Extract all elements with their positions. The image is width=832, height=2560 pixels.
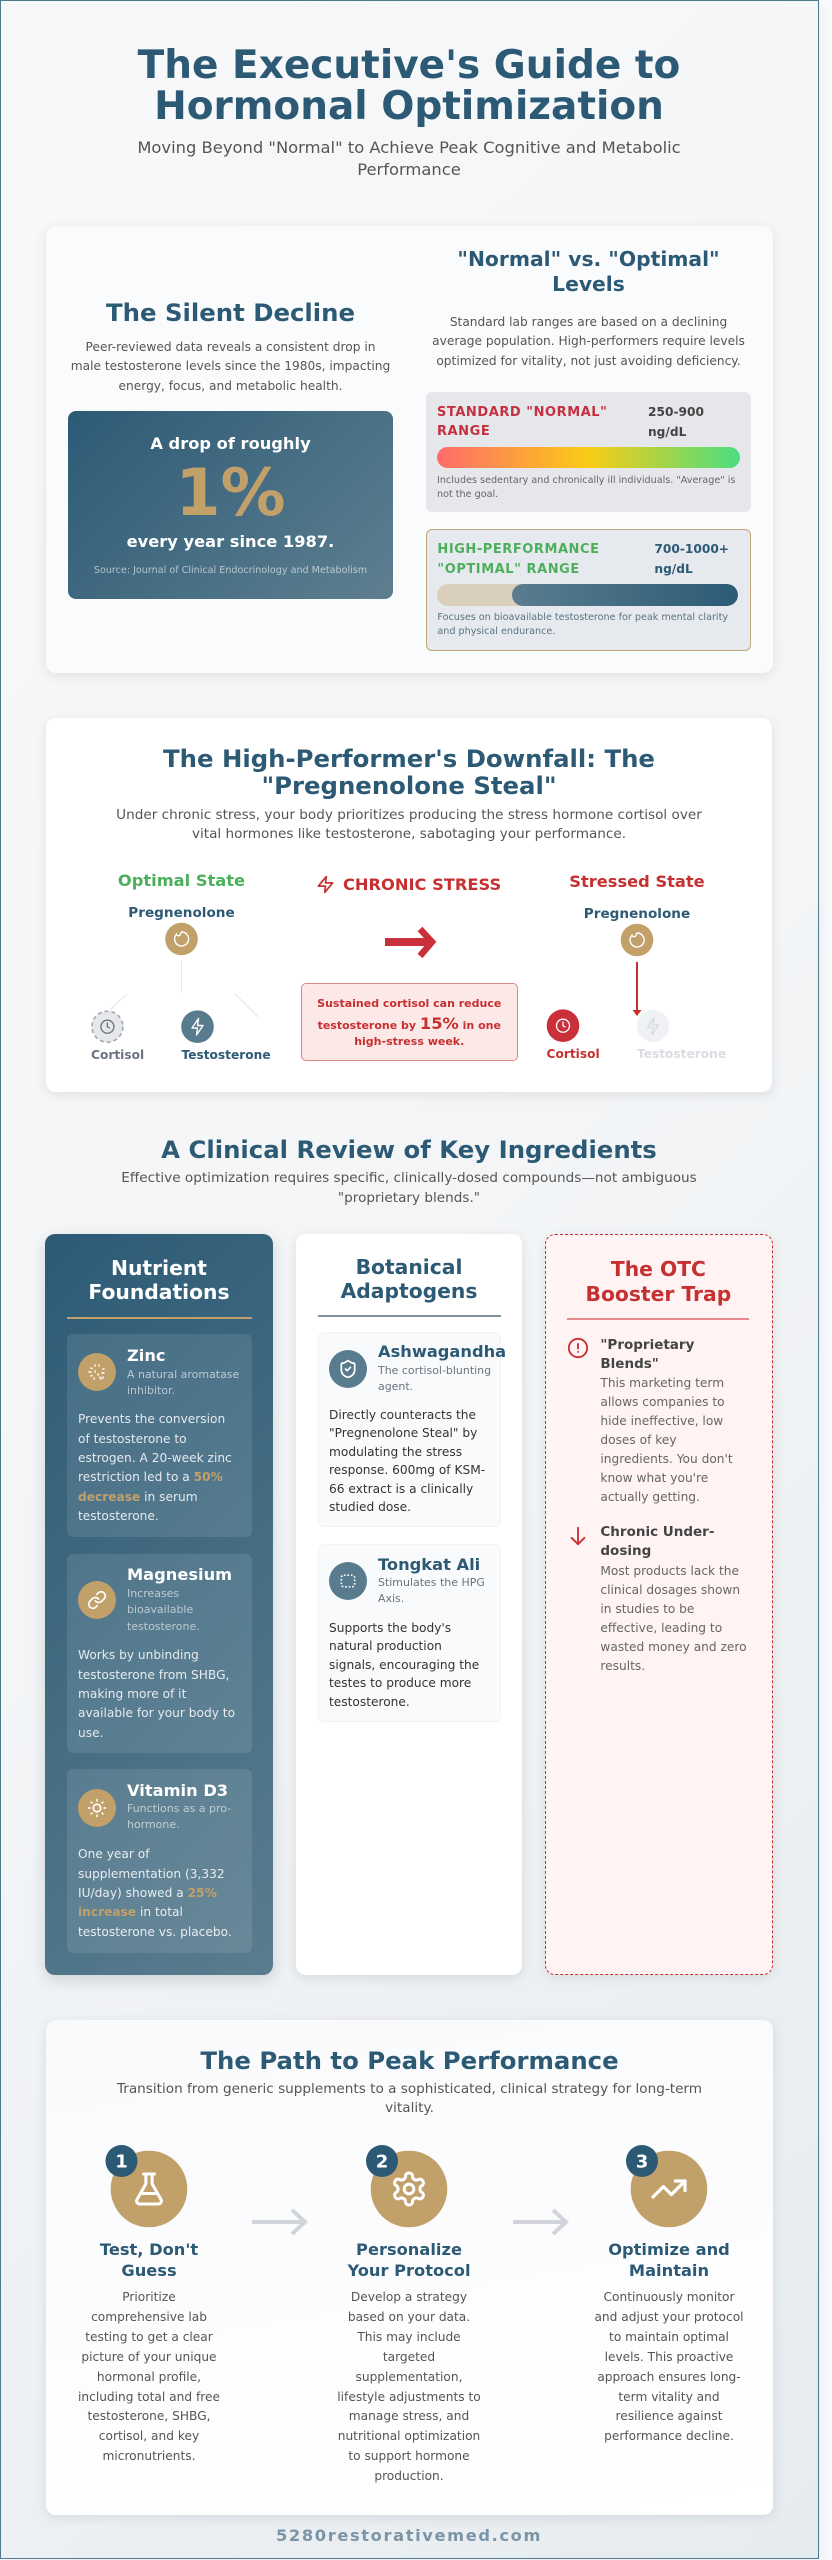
body: supplementation (3,332 <box>78 1866 225 1880</box>
callout: cortisol reduces testosterone <box>301 983 518 1061</box>
description: vitality. <box>385 2100 434 2116</box>
item body: proprietary blends: know what you're <box>600 1471 708 1485</box>
heading <box>163 744 655 800</box>
body <box>78 1648 235 1740</box>
step body <box>329 2288 489 2487</box>
name: Magnesium <box>127 1565 232 1584</box>
text: normal vs optimal description <box>432 315 745 368</box>
text: silent decline description: energy, focus, and metabolic health. <box>119 379 342 393</box>
connector lines <box>110 960 258 1017</box>
range label: HIGH-PERFORMANCE <box>437 542 600 557</box>
icon: magnesium <box>78 1581 116 1619</box>
step 1 <box>69 2140 229 2490</box>
step body <box>589 2288 749 2447</box>
description <box>46 2080 773 2118</box>
body <box>329 1620 479 1708</box>
title: The Executive's Guide to <box>138 43 680 88</box>
step body: lifestyle adjustments to <box>337 2390 481 2404</box>
heading: normal vs optimal: Levels <box>552 272 625 296</box>
body: natural production <box>329 1639 442 1653</box>
testosterone label: Testosterone <box>182 1048 271 1062</box>
body <box>329 1408 485 1514</box>
column divider <box>67 1317 252 1318</box>
step body: cortisol, and key <box>99 2429 199 2443</box>
item body: chronic under-dosing <box>600 1562 747 1676</box>
description <box>116 807 702 842</box>
text: normal vs optimal description: Standard lab ranges are based on a declining <box>450 315 727 329</box>
step body: Develop a strategy <box>351 2290 467 2304</box>
stat follow-up: every year since 1987. <box>127 532 334 551</box>
step title: Your Protocol <box>347 2261 471 2280</box>
pregnenolone label: Pregnenolone <box>584 906 690 922</box>
item body: chronic under-dosing: results. <box>600 1659 645 1673</box>
panel: pregnenolone steal <box>46 718 772 1092</box>
body <box>78 1412 232 1523</box>
body: IU/day) showed a 25% <box>78 1886 217 1900</box>
body: testosterone vs. placebo. <box>78 1925 232 1939</box>
step body: resilience against <box>616 2409 722 2423</box>
item title: proprietary blends <box>600 1337 694 1372</box>
body: testosterone. <box>329 1694 410 1708</box>
column heading <box>88 1256 230 1304</box>
range gradient bar <box>437 447 740 468</box>
body: testes to produce more <box>329 1676 471 1690</box>
title: Hormonal Optimization <box>154 84 664 129</box>
icon: faded testosterone node <box>637 1010 669 1042</box>
panel: path to peak performance <box>46 2020 773 2515</box>
step body: to maintain optimal <box>609 2330 729 2344</box>
step body: levels. This proactive <box>605 2350 733 2364</box>
step title <box>589 2239 749 2281</box>
item body: chronic under-dosing: effective, leading to <box>600 1621 722 1635</box>
step title: Guess <box>121 2261 177 2280</box>
icon: vitamin d3 <box>78 1789 116 1827</box>
body: Supports the body's <box>329 1620 451 1634</box>
icon: tongkat ali <box>329 1562 367 1600</box>
item body: chronic under-dosing: wasted money and zero <box>600 1640 747 1654</box>
description <box>121 1170 697 1206</box>
diagram: optimal state <box>91 871 271 1062</box>
body: decrease in serum <box>78 1490 198 1504</box>
stat lead-in: A drop of roughly <box>150 434 311 453</box>
tagline <box>127 1368 239 1397</box>
icon: ashwagandha <box>329 1350 367 1388</box>
callout: cortisol reduces testosterone: Sustained cortisol can reduce <box>317 997 501 1010</box>
step title: Optimize and <box>608 2240 730 2259</box>
stat number: 1% <box>175 456 286 531</box>
icon: alert circle <box>568 1338 588 1358</box>
item body: chronic under-dosing: clinical dosages shown <box>600 1583 740 1597</box>
name: Ashwagandha <box>378 1342 506 1361</box>
heading: The Path to Peak Performance <box>200 2046 619 2075</box>
tagline: Increases <box>127 1587 179 1600</box>
body: One year of <box>78 1847 150 1861</box>
tagline: testosterone. <box>127 1620 200 1633</box>
optimal pathway nodes <box>91 922 258 1043</box>
chronic stress label: CHRONIC STRESS <box>343 875 501 894</box>
range label: RANGE <box>437 424 490 439</box>
body: testosterone. <box>78 1509 159 1523</box>
range note: Focuses on bioavailable testosterone for peak mental clarity <box>437 612 728 623</box>
step title <box>329 2239 489 2281</box>
column heading: The OTC <box>611 1257 706 1281</box>
range box: standard normal <box>426 392 751 512</box>
item body: proprietary blends: hide ineffective, low <box>600 1414 723 1428</box>
item title: proprietary blends: Blends" <box>600 1356 659 1372</box>
column heading <box>340 1255 477 1303</box>
column heading <box>586 1257 731 1306</box>
tagline: Functions as a pro- <box>127 1802 231 1815</box>
text: silent decline description <box>71 340 390 393</box>
range note <box>437 612 728 637</box>
icon: cortisol node <box>92 1011 123 1042</box>
body: Directly counteracts the <box>329 1408 476 1422</box>
step body: supplementation, <box>356 2370 462 2384</box>
panel: silent decline and normal vs optimal <box>46 226 773 673</box>
range label <box>437 542 600 577</box>
step body: comprehensive lab <box>91 2310 207 2324</box>
tagline: bioavailable <box>127 1603 193 1616</box>
step title: Test, Don't <box>100 2240 198 2259</box>
item body: proprietary blends <box>600 1376 733 1504</box>
body: use. <box>78 1726 103 1740</box>
step body: based on your data. <box>348 2310 470 2324</box>
tagline: Stimulates the HPG <box>378 1576 485 1589</box>
card: ashwagandha <box>318 1332 501 1527</box>
item body: proprietary blends: actually getting. <box>600 1490 700 1504</box>
subtitle: Performance <box>357 160 461 179</box>
step body: and adjust your protocol <box>594 2310 744 2324</box>
name: Zinc <box>127 1346 166 1365</box>
stat box: 1% drop <box>68 411 393 599</box>
subtitle <box>137 138 681 179</box>
range value: ng/dL <box>654 562 693 576</box>
item body: chronic under-dosing: Most products lack the <box>600 1564 739 1578</box>
name: Tongkat Ali <box>378 1555 480 1574</box>
column heading: Botanical <box>356 1255 462 1279</box>
item body: proprietary blends: This marketing term <box>600 1376 724 1390</box>
step body: Continuously monitor <box>604 2290 734 2304</box>
pregnenolone label: Pregnenolone <box>128 904 235 920</box>
panel: nutrient foundations <box>45 1234 273 1975</box>
body: increase in total <box>78 1905 183 1919</box>
arrow: stress transition <box>385 926 436 958</box>
stressed pathway nodes <box>546 924 669 1042</box>
step title: Maintain <box>629 2261 709 2280</box>
range note: not the goal. <box>437 488 498 500</box>
step body: targeted <box>383 2350 435 2364</box>
step body: production. <box>374 2469 444 2483</box>
text: silent decline description: Peer-reviewed data reveals a consistent drop in <box>86 340 375 354</box>
step body: picture of your unique <box>81 2350 217 2364</box>
range note: and physical endurance. <box>437 626 555 637</box>
description: vital hormones like testosterone, sabotaging your performance. <box>192 826 626 842</box>
icon: flask with number 1 <box>69 2140 229 2230</box>
step body: nutritional optimization <box>338 2429 480 2443</box>
heading: normal vs optimal: "Normal" vs. "Optimal" <box>457 247 720 271</box>
body: signals, encouraging the <box>329 1658 479 1672</box>
callout: cortisol reduces testosterone: high-stress week. <box>354 1035 464 1048</box>
step body: performance decline. <box>604 2429 734 2443</box>
tagline: inhibitor. <box>127 1384 175 1397</box>
testosterone label: Testosterone <box>637 1047 726 1061</box>
tagline <box>127 1587 200 1633</box>
step body: including total and free <box>78 2390 220 2404</box>
description: Under chronic stress, your body prioritizes producing the stress hormone cortisol over <box>116 807 702 823</box>
body: modulating the stress <box>329 1444 462 1458</box>
tagline: Axis. <box>378 1592 404 1605</box>
step body: micronutrients. <box>102 2449 196 2463</box>
icon: trending up with number 3: 3 <box>636 2152 648 2172</box>
column divider <box>318 1315 501 1316</box>
step title <box>69 2239 229 2281</box>
stressed state heading: Stressed State <box>569 872 705 891</box>
heading: normal vs optimal <box>457 247 720 296</box>
item body: chronic under-dosing: in studies to be <box>600 1602 694 1616</box>
body: 66 extract is a clinically <box>329 1482 473 1496</box>
step title: Personalize <box>356 2240 462 2259</box>
heading: A Clinical Review of Key Ingredients <box>161 1135 657 1164</box>
step body <box>69 2288 229 2467</box>
icon: arrow down <box>570 1526 586 1546</box>
icon: lightning bolt <box>318 876 334 894</box>
body: Prevents the conversion <box>78 1412 225 1426</box>
range value: 250-900 <box>648 405 704 419</box>
description: Transition from generic supplements to a sophisticated, clinical strategy for long-term <box>117 2081 702 2097</box>
tagline: agent. <box>378 1380 413 1393</box>
step body: testing to get a clear <box>85 2330 213 2344</box>
range value <box>648 405 704 438</box>
callout: cortisol reduces testosterone: testosterone by 15% in one <box>318 1014 501 1033</box>
icon: flask with number 1: 1 <box>115 2152 128 2172</box>
arrow: pregnenolone to cortisol <box>632 962 642 1016</box>
item title: chronic under-dosing: dosing <box>600 1543 651 1559</box>
body: studied dose. <box>329 1500 411 1514</box>
item body: proprietary blends: allows companies to <box>600 1395 725 1409</box>
icon: zinc <box>78 1353 116 1391</box>
diagram: chronic stress center <box>301 875 518 1061</box>
body: of testosterone to <box>78 1432 187 1446</box>
panel: otc booster trap <box>545 1234 773 1975</box>
item body: proprietary blends: doses of key <box>600 1433 677 1447</box>
range value: ng/dL <box>648 424 686 438</box>
description: "proprietary blends." <box>338 1190 480 1206</box>
range bar fill <box>512 584 738 606</box>
card: tongkat ali <box>318 1544 501 1722</box>
column divider <box>567 1318 749 1320</box>
icon: cortisol node <box>547 1009 579 1042</box>
body: Works by unbinding <box>78 1648 199 1662</box>
range note: Includes sedentary and chronically ill individuals. "Average" is <box>437 475 735 486</box>
column heading: Nutrient <box>111 1256 207 1280</box>
card: zinc <box>67 1334 252 1537</box>
body: response. 600mg of KSM- <box>329 1463 485 1477</box>
icon: pregnenolone node <box>165 923 198 955</box>
optimal state heading: Optimal State <box>118 871 245 890</box>
subtitle: Moving Beyond "Normal" to Achieve Peak Cognitive and Metabolic <box>137 138 681 157</box>
text: normal vs optimal description: optimized for vitality, not just avoiding deficiency. <box>436 354 741 368</box>
name: Vitamin D3 <box>127 1781 228 1800</box>
range box: high-performance optimal <box>426 529 751 651</box>
panel: botanical adaptogens <box>296 1234 522 1975</box>
body: testosterone from SHBG, <box>78 1668 229 1682</box>
body: restriction led to a 50% <box>78 1470 223 1484</box>
icon: trending up with number 3 <box>589 2140 749 2230</box>
section heading: clinical review <box>121 1135 697 1206</box>
stat source: Source: Journal of Clinical Endocrinology and Metabolism <box>94 565 367 576</box>
description: Effective optimization requires specific, clinically-dosed compounds—not ambiguous <box>121 1170 697 1186</box>
tagline: A natural aromatase <box>127 1368 239 1381</box>
step body: hormonal profile, <box>97 2370 201 2384</box>
arrow: step 1 to 2 <box>252 2208 308 2236</box>
item title: chronic under-dosing <box>600 1523 714 1561</box>
range label <box>437 405 607 439</box>
body <box>78 1847 232 1939</box>
column heading: Booster Trap <box>586 1282 731 1306</box>
step body: term vitality and <box>618 2390 720 2404</box>
cortisol label: Cortisol <box>546 1047 600 1061</box>
body: available for your body to <box>78 1706 235 1720</box>
range bar <box>437 584 738 606</box>
step body: Prioritize <box>122 2290 176 2304</box>
tagline <box>127 1802 231 1831</box>
tagline: The cortisol-blunting <box>378 1364 491 1377</box>
diagram: stressed state <box>546 872 726 1061</box>
icon: gear with number 2: 2 <box>376 2152 388 2172</box>
heading: the silent decline: The Silent Decline <box>106 298 355 327</box>
tagline: hormone. <box>127 1818 180 1831</box>
step 3 <box>589 2140 749 2490</box>
cortisol label: Cortisol <box>91 1048 144 1062</box>
body: making more of it <box>78 1687 186 1701</box>
arrow: step 2 to 3 <box>513 2208 569 2236</box>
item title: chronic under-dosing: Chronic Under- <box>600 1524 714 1540</box>
heading: The High-Performer's Downfall: The <box>163 744 655 773</box>
title <box>138 43 680 129</box>
tagline <box>378 1576 485 1605</box>
range label: STANDARD "NORMAL" <box>437 405 607 420</box>
range value: 700-1000+ <box>654 542 729 556</box>
step body: This may include <box>357 2330 461 2344</box>
icon: pregnenolone node <box>621 924 653 956</box>
step body: testosterone, SHBG, <box>87 2409 211 2423</box>
body: estrogen. A 20-week zinc <box>78 1451 232 1465</box>
tagline <box>378 1364 491 1393</box>
text: normal vs optimal description: average population. High-performers require levels <box>432 334 745 348</box>
item body: proprietary blends: ingredients. You don't <box>600 1452 733 1466</box>
step body: to support hormone <box>348 2449 470 2463</box>
step body: approach ensures long- <box>597 2370 741 2384</box>
column heading: Foundations <box>88 1280 230 1304</box>
icon: testosterone node <box>181 1010 214 1043</box>
step body: manage stress, and <box>349 2409 469 2423</box>
footer url: 5280restorativemed.com <box>276 2526 542 2545</box>
card: vitamin d3 <box>67 1769 252 1953</box>
text: silent decline description: male testosterone levels since the 1980s, impacting <box>71 359 390 373</box>
header <box>137 43 681 179</box>
range label: "OPTIMAL" RANGE <box>437 562 580 577</box>
step 2 <box>329 2140 489 2490</box>
range value <box>654 542 729 576</box>
body: "Pregnenolone Steal" by <box>329 1426 477 1440</box>
item title: proprietary blends: "Proprietary <box>600 1337 694 1353</box>
range note <box>437 475 735 500</box>
heading: "Pregnenolone Steal" <box>261 771 557 800</box>
column heading: Adaptogens <box>341 1279 477 1303</box>
card: magnesium <box>67 1554 252 1753</box>
icon: gear with number 2 <box>329 2140 489 2230</box>
